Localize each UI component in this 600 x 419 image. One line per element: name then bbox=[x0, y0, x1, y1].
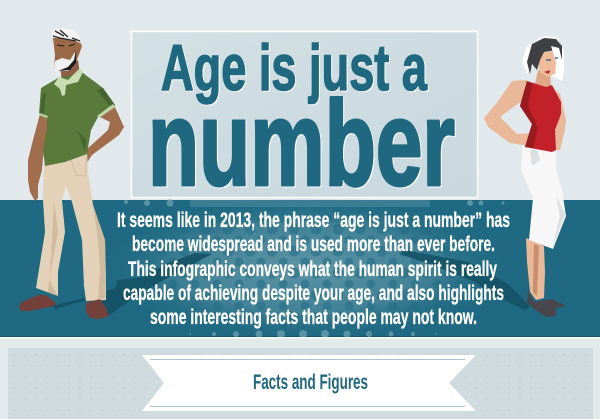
title: Age is just a bbox=[161, 31, 429, 105]
title panel bbox=[132, 31, 478, 212]
man: shirt bbox=[39, 68, 115, 166]
woman: red top bbox=[520, 81, 561, 152]
man: back arm bbox=[28, 114, 49, 201]
banner heading: Facts and Figures bbox=[253, 371, 368, 394]
halftone background bbox=[124, 198, 504, 337]
man: shoes bbox=[19, 295, 109, 319]
title: number bbox=[148, 75, 456, 212]
man: trousers bbox=[36, 152, 106, 301]
title: Age is just a: Age is just a bbox=[162, 32, 429, 105]
man: front arm bbox=[80, 105, 124, 164]
man illustration bbox=[19, 28, 124, 319]
title: Age is just a: Age is just a bbox=[161, 31, 428, 104]
woman: white trousers bbox=[521, 146, 566, 249]
woman: hair back bbox=[522, 36, 564, 81]
woman: head bbox=[527, 38, 562, 80]
man: head bbox=[51, 28, 82, 71]
woman: shoes bbox=[527, 290, 566, 317]
title: number: number bbox=[148, 75, 455, 211]
intro text bbox=[117, 209, 510, 329]
woman: far arm bbox=[553, 88, 566, 150]
woman illustration bbox=[484, 36, 566, 317]
man: neck bbox=[60, 60, 80, 82]
woman: calves bbox=[526, 238, 545, 300]
woman: neck bbox=[535, 70, 551, 90]
figure shadows bbox=[52, 250, 530, 316]
ribbon banner bbox=[142, 355, 476, 411]
teal band bbox=[0, 200, 600, 337]
facts section panel bbox=[0, 337, 600, 419]
title: number: number bbox=[149, 76, 456, 212]
woman: near arm bbox=[484, 80, 540, 146]
